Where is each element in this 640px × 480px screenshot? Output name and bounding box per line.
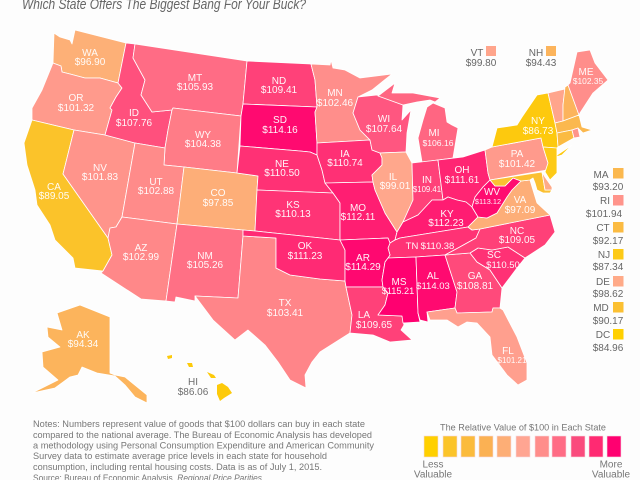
state: WA: WA xyxy=(82,48,98,59)
callout: NJ xyxy=(593,249,624,273)
state: WA: $96.90 xyxy=(75,57,106,68)
state: AL xyxy=(416,255,457,322)
callout: VT: $99.80 xyxy=(466,58,497,69)
state: OH: $111.61 xyxy=(445,175,480,186)
state: NM: $105.26 xyxy=(187,260,224,271)
state: IA: IA xyxy=(340,149,350,160)
state: NY: $86.73 xyxy=(523,126,554,137)
state: VA xyxy=(468,180,550,230)
state: NY xyxy=(492,93,572,157)
state: MN: MN xyxy=(327,88,343,99)
state: TN: TN xyxy=(406,241,418,252)
callout: DE xyxy=(593,276,624,300)
state: CO: $97.85 xyxy=(203,198,234,209)
notes text block: compared to the national average. The Bureau of Economic Analysis has developed xyxy=(33,430,372,441)
notes text block: consumption, including rental housing costs. Data is as of July 1, 2015. xyxy=(33,462,322,473)
state: NV xyxy=(63,130,135,238)
state: MN xyxy=(311,60,392,143)
state: NC: NC xyxy=(510,226,524,237)
callout: DE: $98.62 xyxy=(593,289,624,300)
state: IA: $110.74 xyxy=(327,158,363,169)
state: GA xyxy=(445,253,502,313)
callout: DC: DC xyxy=(596,330,610,341)
state: MT xyxy=(133,44,247,116)
state: AL: AL xyxy=(427,271,440,282)
callout: RI: RI xyxy=(600,196,610,207)
callout: RI: $101.94 xyxy=(586,209,623,220)
state: WA xyxy=(53,30,126,83)
map of states xyxy=(24,30,608,403)
state: AR xyxy=(340,238,390,287)
state: WV: WV xyxy=(484,187,500,198)
state: AK xyxy=(32,305,147,403)
state: FL: FL xyxy=(502,346,514,357)
state: KY: KY xyxy=(440,209,454,220)
state: UT xyxy=(122,143,184,224)
state: TX: TX xyxy=(279,298,292,309)
state: SD: SD xyxy=(273,115,287,126)
state: OK: $111.23 xyxy=(288,251,323,262)
state: NC: $109.05 xyxy=(499,235,536,246)
state: TN xyxy=(388,227,480,258)
legend swatches xyxy=(424,436,621,457)
state: MD xyxy=(490,172,552,193)
state: CA: CA xyxy=(47,182,61,193)
state: NE: NE xyxy=(275,159,289,170)
state: MO xyxy=(325,182,397,243)
state: PA: PA xyxy=(511,149,524,160)
state: WI: WI xyxy=(378,114,390,125)
callout: MD: MD xyxy=(593,303,609,314)
state: FL: $101.21 xyxy=(498,356,527,365)
state: AL: $114.03 xyxy=(416,281,450,292)
state: CO: CO xyxy=(210,188,226,199)
state: ME: ME xyxy=(578,67,594,78)
state: OR: OR xyxy=(68,93,84,104)
state: PA xyxy=(485,138,548,180)
state: FL xyxy=(427,308,527,385)
state: ND: ND xyxy=(272,76,286,87)
callout: NH: NH xyxy=(529,48,543,59)
state: VT xyxy=(548,89,565,123)
state: KY xyxy=(395,197,478,240)
state: MI: $106.16 xyxy=(422,138,454,148)
callout: CT: CT xyxy=(596,223,610,234)
legend high label xyxy=(592,460,631,480)
state: GA: GA xyxy=(468,271,483,282)
state: NY: NY xyxy=(531,116,545,127)
callout: MA xyxy=(593,168,624,193)
state: OR xyxy=(32,63,122,135)
state: IN: IN xyxy=(422,175,432,186)
state: UT: UT xyxy=(149,177,163,188)
state: CA xyxy=(24,120,112,271)
state: MO: MO xyxy=(350,203,366,214)
state: VA: VA xyxy=(514,195,527,206)
state: AK: $94.34 xyxy=(68,339,99,350)
state: NE xyxy=(237,146,333,193)
state: WV xyxy=(472,178,521,218)
state: IA xyxy=(317,140,382,183)
state: LA xyxy=(346,287,412,342)
callout: MD: $90.17 xyxy=(593,316,624,327)
callout: DE: DE xyxy=(596,277,610,288)
state: CT xyxy=(557,130,574,147)
state: CA: $89.05 xyxy=(39,191,70,202)
notes text block: a methodology using Personal Consumption Expenditure and American Community xyxy=(33,440,374,452)
notes text block: Survey data to estimate average price levels in each state for household xyxy=(33,451,327,462)
state: TN: $110.38 xyxy=(421,241,454,252)
callout: MA: $93.20 xyxy=(593,182,624,193)
state: OH: OH xyxy=(454,165,470,176)
state: ME xyxy=(568,50,608,115)
state: SC xyxy=(470,247,525,288)
state: MT: MT xyxy=(188,73,202,84)
state: OH xyxy=(438,150,490,207)
state: MI: MI xyxy=(428,128,440,139)
callout: MA: MA xyxy=(594,170,609,181)
state: HI xyxy=(167,355,232,401)
state: MS xyxy=(378,257,420,323)
state: SC: SC xyxy=(487,250,501,261)
state: LA: LA xyxy=(358,310,370,321)
legend low label xyxy=(414,460,453,480)
state: ID xyxy=(105,43,172,148)
callout: CT: $92.17 xyxy=(593,236,624,247)
state: NM: NM xyxy=(197,251,213,262)
state: AZ: $102.99 xyxy=(123,252,160,263)
state: HI: HI xyxy=(188,377,198,388)
state: HI: $86.06 xyxy=(178,387,209,398)
state: LA: $109.65 xyxy=(356,320,393,331)
state: IL xyxy=(372,152,413,232)
state: KY: $112.23 xyxy=(428,218,464,229)
state: PA: $101.42 xyxy=(499,159,536,170)
state: WI: $107.64 xyxy=(366,124,403,135)
state: IL: $99.01 xyxy=(380,181,411,192)
state: GA: $108.81 xyxy=(457,281,494,292)
state: NV: NV xyxy=(93,163,107,174)
state: UT: $102.88 xyxy=(138,186,175,197)
state: MO: $112.11 xyxy=(341,212,376,223)
callout: RI xyxy=(586,195,624,220)
state: MS: MS xyxy=(392,277,407,288)
callout: NJ: $87.34 xyxy=(593,262,624,273)
callout: MD xyxy=(593,302,624,327)
state: ND xyxy=(243,61,317,107)
legend xyxy=(414,422,631,480)
state: AK: AK xyxy=(76,330,90,341)
state: OK: OK xyxy=(298,241,313,252)
state: RI xyxy=(572,128,580,138)
notes text block: Notes: Numbers represent value of goods that $100 dollars can buy in each state xyxy=(33,419,365,430)
state: DE xyxy=(542,172,552,190)
callout: NH: $94.43 xyxy=(526,58,557,69)
state: KS xyxy=(255,190,340,240)
state: IL: IL xyxy=(389,172,398,183)
state: SD xyxy=(240,104,317,155)
legend low label: Less xyxy=(422,460,444,470)
state: AR: $114.29 xyxy=(345,262,381,273)
notes text block xyxy=(33,419,374,480)
state: NC xyxy=(445,215,555,258)
state: OR: $101.32 xyxy=(58,103,95,114)
state: CO xyxy=(177,167,258,231)
state: WY: WY xyxy=(195,130,211,141)
state: OK xyxy=(243,230,345,281)
state: NH xyxy=(563,85,579,121)
callout: CT xyxy=(593,222,624,247)
state: SC: $110.50 xyxy=(486,260,520,271)
state: MI xyxy=(378,83,458,162)
state: AR: AR xyxy=(356,253,370,264)
callout: VT xyxy=(466,46,497,69)
callout: NH xyxy=(526,46,557,69)
state: MS: $115.21 xyxy=(382,286,414,296)
state: TX: $103.41 xyxy=(267,308,304,319)
legend high label: More xyxy=(600,460,623,470)
state: TX xyxy=(195,236,352,388)
state: ID: $107.76 xyxy=(116,118,153,129)
state: NJ xyxy=(543,147,557,180)
state: VA: $97.09 xyxy=(505,205,536,216)
state: WI xyxy=(353,95,411,153)
state: ND: $109.41 xyxy=(261,85,298,96)
state: KS: $110.13 xyxy=(275,209,311,220)
state: ME: $102.35 xyxy=(573,76,603,86)
state: MT: $105.93 xyxy=(177,82,214,93)
state: NV: $101.83 xyxy=(82,172,119,183)
state: IN: $109.41 xyxy=(413,185,441,194)
callout: DC xyxy=(593,329,624,354)
state: SD: $114.16 xyxy=(262,125,298,136)
legend title: The Relative Value of $100 in Each State xyxy=(440,422,606,434)
state: KS: KS xyxy=(286,200,300,211)
state: WV: $113.12 xyxy=(475,197,501,206)
state: NM xyxy=(166,224,243,302)
state: IN xyxy=(403,160,443,222)
state: WY xyxy=(164,108,241,173)
callout: DC: $84.96 xyxy=(593,343,624,354)
callout: VT: VT xyxy=(471,48,483,59)
state: MN: $102.46 xyxy=(317,98,354,109)
callout: NJ: NJ xyxy=(598,250,610,261)
state: MA xyxy=(555,115,592,133)
state: WY: $104.38 xyxy=(185,139,222,150)
state: AZ xyxy=(101,217,177,301)
state: NE: $110.50 xyxy=(264,168,300,179)
state: AZ: AZ xyxy=(135,243,147,254)
state: ID: ID xyxy=(129,108,139,119)
